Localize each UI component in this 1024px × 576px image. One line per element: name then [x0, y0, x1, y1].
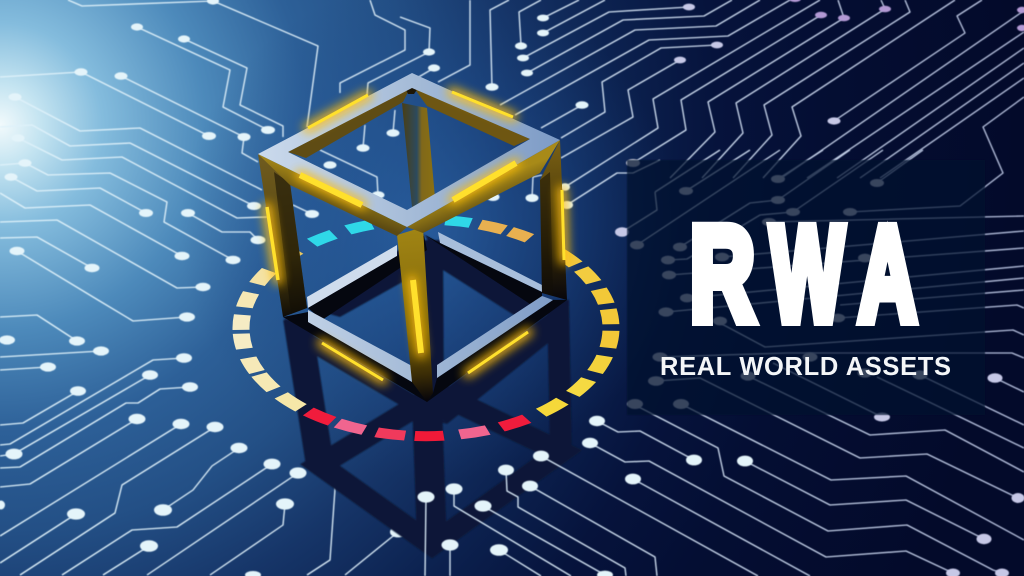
title: RWA — [690, 200, 917, 349]
subtitle: REAL WORLD ASSETS: REAL WORLD ASSETS — [660, 353, 951, 381]
cube reflection on the circuit floor — [283, 234, 567, 545]
cube top frame silver faces — [258, 73, 560, 227]
cube top frame inner walls — [288, 85, 530, 158]
cube front pillar — [397, 227, 433, 402]
dashed ring: yellow, red, cream and cyan segments — [241, 220, 611, 436]
glowing strips blur layer — [267, 92, 564, 380]
cube back pillar — [402, 103, 435, 207]
cube left pillar — [258, 154, 307, 317]
dark title panel backdrop — [627, 160, 985, 415]
wireframe cube — [258, 73, 567, 402]
glowing strips core — [267, 92, 564, 380]
title: RWA: A — [858, 200, 917, 349]
cube top frame gold faces — [258, 140, 560, 236]
traces and nodes crossing the reflection — [418, 451, 758, 576]
cube right pillar — [540, 140, 567, 300]
circuit nodes, left and centre — [0, 0, 753, 576]
cube bottom frame, back edges — [307, 232, 542, 320]
circuit nodes, right side — [615, 0, 1024, 576]
title: RWA: W — [770, 200, 844, 349]
cube bottom frame, front edges — [283, 296, 567, 402]
title: RWA: R — [690, 200, 755, 349]
